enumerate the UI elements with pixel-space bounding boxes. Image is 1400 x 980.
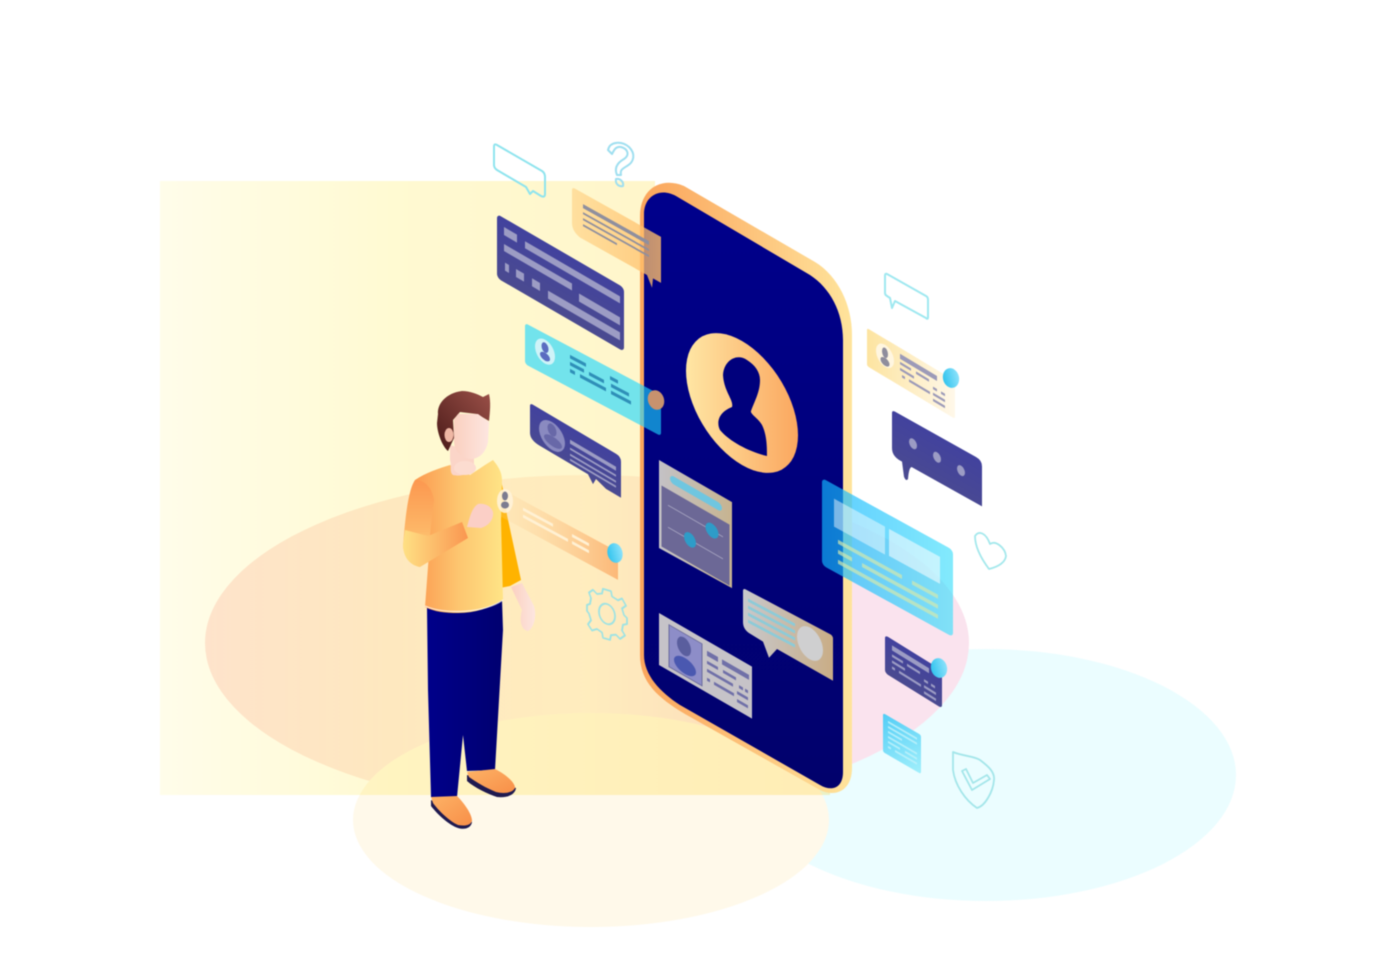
outline heart icon [975,533,1006,569]
cyan knob on orange card [605,541,625,565]
man trousers [427,600,503,797]
orange note body [572,187,661,293]
phone [640,183,852,793]
cyan card person [540,340,550,363]
profile avatar [686,309,798,497]
small dark card lines [892,645,936,701]
phone screen [644,192,843,788]
slider card [659,460,732,590]
man face [454,414,489,459]
slider knobs [684,507,718,563]
cyan knob on small dark card [929,656,949,680]
chat avatar circle [797,621,823,666]
id text lines [707,651,749,709]
pale card lines [900,354,945,408]
cyan knob on pale card [941,366,961,390]
slider track lines [668,505,723,559]
man upper arm sleeve [403,480,434,567]
id card base [659,613,752,719]
dark typing bubble [892,410,982,522]
window left pane [834,499,885,555]
man forearm sleeve [403,522,468,567]
avatar badge on orange card [497,489,513,513]
cyan card lines [570,355,631,405]
badge person [501,492,509,508]
knob on cyan card [645,388,667,412]
chat bubble on screen [743,588,833,692]
orange note card [572,187,661,293]
outline chat icon top right [885,274,928,319]
chat bubble body [743,588,833,692]
id photo [669,625,702,686]
small dark card [885,635,942,708]
man rear forearm and hand [511,583,535,631]
small cyan document [883,713,921,774]
small dark card body [885,635,942,708]
dark text panel [497,214,624,352]
pale card body [867,328,955,419]
background shape: cream ellipse [353,713,829,927]
outline shield icon [953,752,994,808]
man neck [450,445,474,476]
man hair [437,391,490,451]
shield check [962,769,990,790]
man rear arm sleeve [495,470,521,588]
front shoe upper [431,796,472,826]
id photo person [674,632,696,680]
man ear [444,428,454,442]
id card [659,613,752,719]
badge disc [497,489,513,513]
cyan card body [525,323,661,436]
orange card lines [523,508,589,553]
window lines [838,540,938,619]
phone frame [640,183,852,793]
transparent orange card [496,486,618,580]
background shape: yellow rectangle [160,181,830,795]
man sweater hem highlight [425,600,503,612]
pale profile card [867,328,955,419]
dark chat lines [570,440,616,488]
man collar neck skin [454,461,476,475]
pale card person [880,345,890,368]
man hand [467,504,493,528]
man front shoe [431,796,472,829]
document body [883,713,921,774]
outline question mark [608,143,633,186]
background shape: cyan ellipse [736,649,1236,901]
dark chat avatar [539,414,565,458]
cyan profile card [525,323,661,436]
slider card base [659,460,732,590]
slider header bar [670,474,722,512]
dark profile chat [530,403,621,501]
large translucent cyan window [822,478,953,637]
outline gear icon [587,584,627,645]
front shoe sole [431,800,472,829]
orange card body [496,486,618,580]
man sweater [415,460,503,613]
background shape: pink ellipse [205,475,969,811]
shield outline [953,752,994,808]
dark panel lines [504,227,620,340]
cyan card avatar [535,334,555,369]
gear hole [599,602,615,626]
pale card avatar [876,339,894,372]
man [403,391,618,829]
gear teeth ring [587,584,627,645]
dark chat body [530,403,621,501]
typing dots [909,437,965,478]
chat lines [748,599,795,648]
dark chat person [544,419,562,452]
man rear shoe [467,769,516,797]
avatar silhouette [718,357,767,456]
window right pane [889,529,940,584]
avatar disc [686,309,798,497]
rear shoe upper [467,769,515,793]
document lines [888,721,917,765]
dark panel body [497,214,624,352]
rear shoe sole [467,775,516,797]
slider panel [662,485,730,586]
window body [822,478,953,637]
note lines [583,204,649,263]
outline chat icon top left [494,144,545,197]
typing bubble body [892,410,982,522]
